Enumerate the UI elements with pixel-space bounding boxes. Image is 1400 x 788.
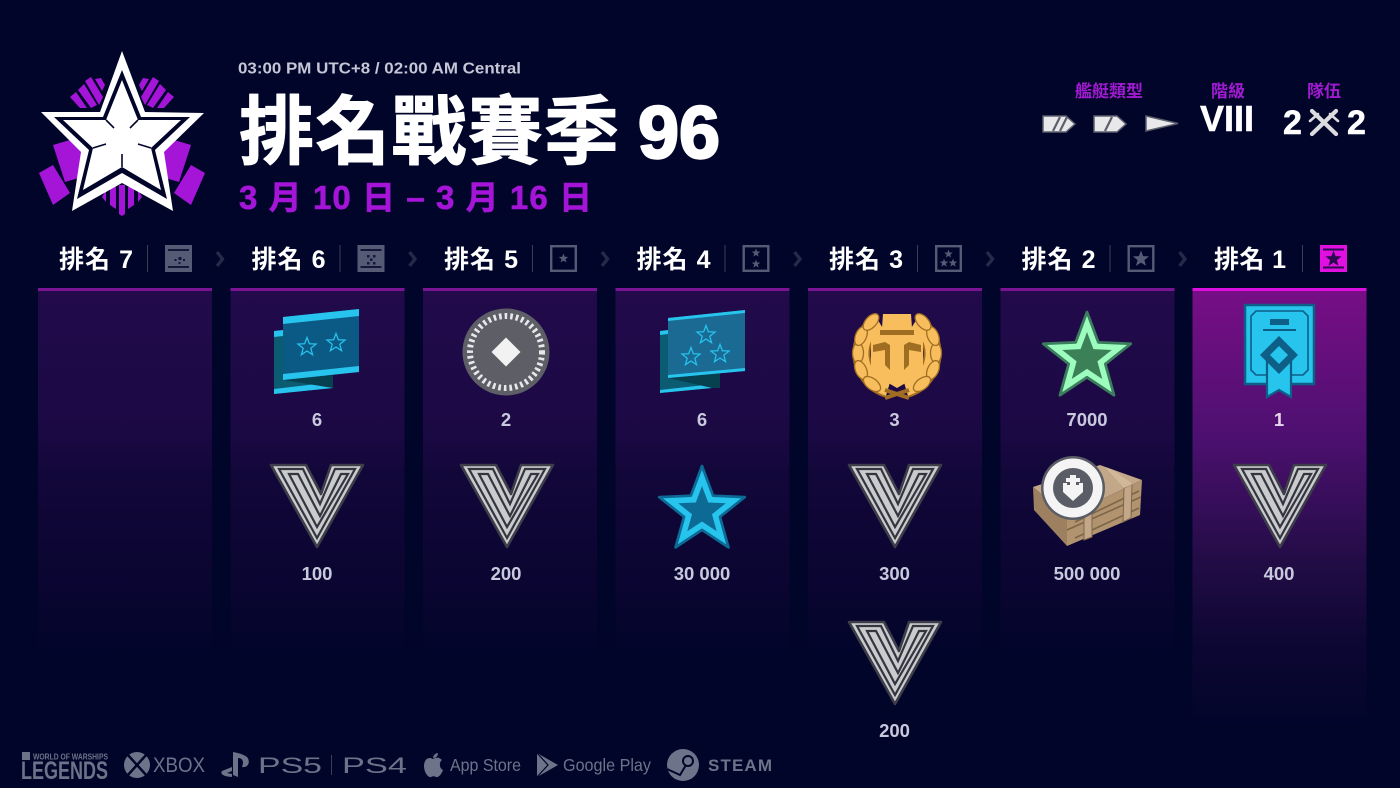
logo: App Store: App Store <box>450 755 521 775</box>
amount: 30 000 <box>674 563 730 584</box>
logo: Steam <box>667 749 772 781</box>
footer: platform logos <box>21 749 772 785</box>
icon: flag three stars <box>660 310 745 393</box>
rank 3 header <box>829 245 961 274</box>
battle info: team <box>1283 82 1366 142</box>
icon: rank 7 badge <box>165 245 192 272</box>
icon: green star <box>1043 312 1131 395</box>
battle info: ship types <box>1043 82 1178 132</box>
amount: 2 <box>501 409 511 430</box>
panel: rank 7 <box>38 288 212 660</box>
logo: World of Warships Legends: LEGENDS <box>21 757 108 785</box>
logo: Google Play: Google Play <box>563 755 651 775</box>
logo: PS5 <box>221 752 322 778</box>
amount: 100 <box>302 563 332 584</box>
amount: 6 <box>312 409 322 430</box>
logo: World of Warships Legends <box>21 752 108 785</box>
icon: rank 1 badge <box>1320 245 1347 272</box>
rank 2 header <box>1022 245 1153 274</box>
icon: blue star <box>659 466 745 547</box>
rank 1 header <box>1214 245 1347 274</box>
amount: 1 <box>1274 409 1284 430</box>
amount: 200 <box>491 563 521 584</box>
icon: credits crate <box>1033 456 1142 546</box>
panel: rank 6 <box>230 288 404 660</box>
panel: rank 5 <box>423 288 597 660</box>
rank 1 header: 排名 1 <box>1214 246 1286 274</box>
logo: World of Warships Legends: WORLD OF WARSHIPS <box>33 752 108 762</box>
arrow <box>410 252 415 266</box>
arrow <box>987 252 992 266</box>
rank 7 header <box>59 245 192 274</box>
time line: 03:00 PM UTC+8 / 02:00 AM Central <box>238 60 521 78</box>
icon: ship class 2 <box>1094 116 1126 132</box>
rank 4 header: 排名 4 <box>636 246 711 274</box>
logo: star emblem <box>39 51 205 216</box>
logo: PS4: PS4 <box>342 753 407 778</box>
icon: ship class 3 <box>1146 116 1178 131</box>
arrow <box>217 252 222 266</box>
icon: ranked token <box>461 465 553 547</box>
battle info: tier: 階級 <box>1211 81 1245 101</box>
icon: rank 5 badge <box>551 246 576 271</box>
amount: 200 <box>879 720 910 741</box>
icon: rank 4 badge <box>744 246 768 271</box>
icon: flag two stars <box>274 309 359 394</box>
battle info: team: 隊伍 <box>1307 82 1341 101</box>
title: 排名戰賽季 <box>239 71 619 180</box>
icon: ranked token <box>849 465 941 547</box>
logo: Steam: STEAM <box>708 756 772 775</box>
logo: App Store <box>424 753 521 777</box>
rank 3 header: 排名 3 <box>829 246 903 274</box>
battle info: team: 2 <box>1283 104 1302 142</box>
logo: Google Play <box>537 753 651 777</box>
logo: PS5: PS5 <box>258 753 322 778</box>
battle info: ship types: 艦艇類型 <box>1075 82 1143 101</box>
rank 5 header: 排名 5 <box>444 246 518 274</box>
arrow <box>1180 252 1185 266</box>
title: 96 <box>638 91 720 174</box>
amount: 400 <box>1264 563 1294 584</box>
arrow <box>602 252 608 266</box>
panel: rank 1 <box>1192 288 1366 730</box>
icon: ship class 1 <box>1043 116 1075 132</box>
icon: crossed swords <box>1310 111 1338 134</box>
rank 2 header: 排名 2 <box>1022 246 1096 274</box>
arrow <box>794 252 800 266</box>
logo: Xbox <box>124 752 205 778</box>
icon: certificate <box>1245 305 1314 397</box>
icon: rank 6 badge <box>358 245 384 272</box>
icon: signal coin <box>462 308 550 396</box>
icon: rank 2 badge <box>1129 246 1153 271</box>
logo: Xbox: XBOX <box>153 754 205 777</box>
amount: 300 <box>879 563 910 584</box>
rank 4 header <box>636 245 768 274</box>
amount: 3 <box>889 409 900 430</box>
rank 6 header <box>252 245 384 274</box>
battle info: team: 2 <box>1347 104 1366 142</box>
panel: rank 3 <box>808 288 982 660</box>
rank 7 header: 排名 7 <box>59 246 133 274</box>
icon: ranked token <box>271 465 363 547</box>
icon: ranked token <box>1234 465 1326 547</box>
amount: 500 000 <box>1054 563 1120 584</box>
battle info: tier: VIII <box>1200 98 1254 139</box>
rank 5 header <box>444 245 576 274</box>
amount: 6 <box>697 409 707 430</box>
panel: rank 2 <box>1000 288 1174 660</box>
icon: laurel emblem <box>852 311 942 398</box>
amount: 7000 <box>1066 409 1108 430</box>
rank 6 header: 排名 6 <box>252 246 326 274</box>
icon: ranked token extra <box>849 622 941 704</box>
panel: rank 4 <box>616 288 790 660</box>
dates: 3 月 10 日 – 3 月 16 日 <box>239 179 592 216</box>
icon: rank 3 badge <box>936 246 961 271</box>
